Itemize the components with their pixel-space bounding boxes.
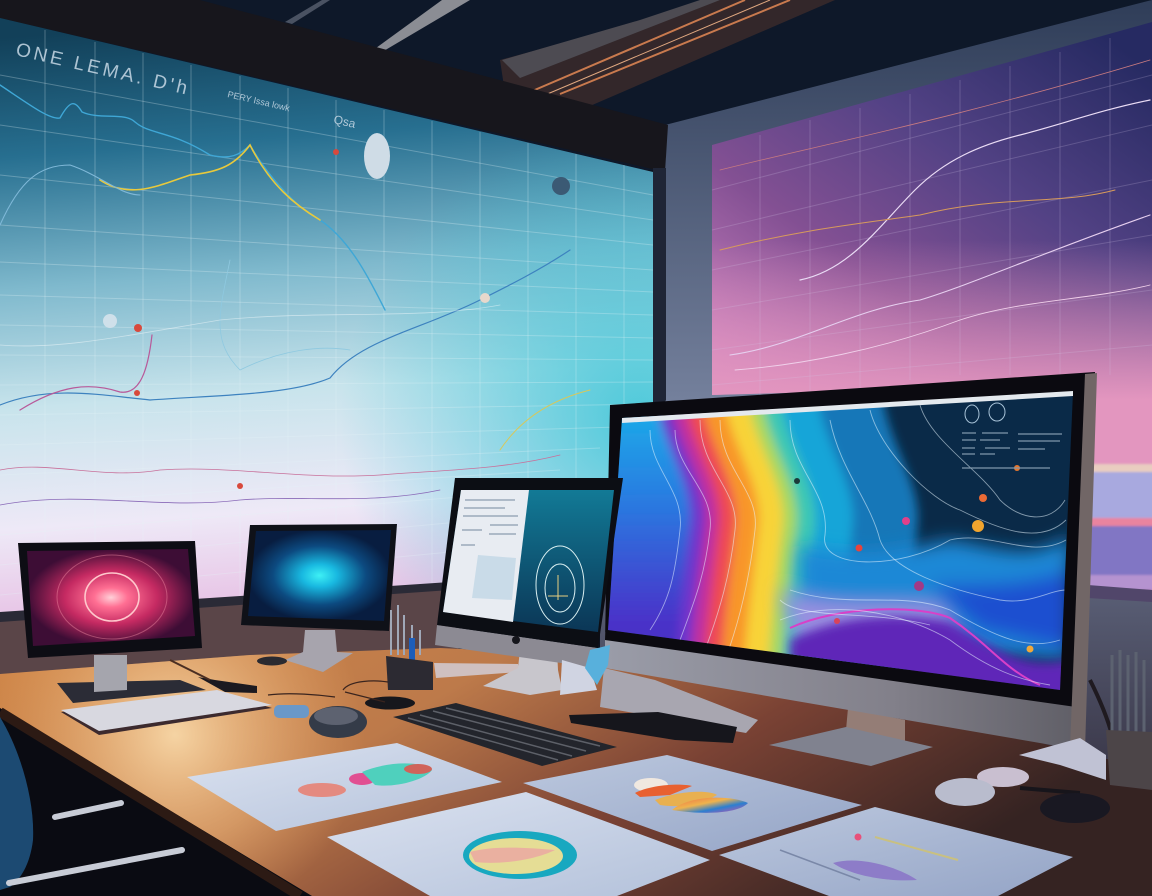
pen holder bbox=[386, 605, 433, 690]
stand neck bbox=[846, 708, 905, 745]
left wall screen bbox=[0, 18, 653, 615]
wall strip below left screen bbox=[0, 582, 460, 675]
chair bbox=[0, 717, 182, 890]
chart blobs bbox=[634, 778, 748, 813]
screen with rainbow wave bbox=[608, 396, 1073, 690]
chin bbox=[605, 632, 1083, 748]
tablet monitor bbox=[435, 478, 623, 695]
desk objects left bbox=[170, 656, 415, 718]
screen info panel bbox=[962, 403, 1062, 468]
chart lines bbox=[720, 60, 1150, 370]
magenta ridge line bbox=[790, 609, 1040, 685]
wall screen labels bbox=[14, 39, 357, 131]
keyboard bbox=[393, 703, 617, 766]
paper: bottom left bbox=[327, 792, 710, 896]
sunset bands at right bbox=[1090, 463, 1152, 590]
paper cone bbox=[560, 645, 610, 695]
chart bbox=[780, 834, 958, 880]
data points bbox=[103, 149, 570, 489]
paper near tablet bbox=[434, 663, 520, 678]
ceiling bbox=[0, 0, 1152, 170]
wall screen labels: PERY Issa lowk bbox=[227, 89, 291, 113]
paper: bottom right bbox=[719, 807, 1073, 896]
wall frame above left screen bbox=[0, 0, 668, 172]
screen frame bottom bbox=[1088, 585, 1152, 602]
grid lines bbox=[0, 30, 653, 610]
right wall screen bbox=[712, 22, 1152, 602]
blue monitor bbox=[241, 524, 397, 672]
wall frame right of left screen bbox=[620, 168, 666, 480]
mouse bbox=[309, 706, 367, 738]
dark object on base bbox=[569, 712, 737, 743]
grid lines bbox=[712, 38, 1152, 400]
desk bbox=[0, 648, 1152, 896]
lower wave region bbox=[780, 535, 1070, 660]
under desk darkness bbox=[0, 700, 320, 896]
wall screen labels: Qsa bbox=[332, 112, 357, 131]
keyboard left bbox=[61, 690, 272, 735]
glass base bbox=[600, 668, 758, 733]
chart lines bbox=[0, 85, 590, 505]
pen cup right bbox=[1090, 650, 1152, 790]
wall screen labels: ONE LEMA. D'h bbox=[14, 39, 189, 99]
chart blobs bbox=[298, 763, 432, 797]
paper: top left bbox=[187, 743, 502, 831]
right wall bbox=[600, 0, 1152, 760]
title bar bbox=[622, 391, 1073, 423]
pink monitor bbox=[18, 541, 206, 703]
pink glow toward bottom of screen bbox=[712, 240, 1152, 467]
document page bbox=[443, 490, 529, 622]
side rim bbox=[1070, 373, 1097, 750]
right mouse and objects bbox=[935, 738, 1110, 823]
large monitor bbox=[569, 372, 1097, 766]
screen flow lines bbox=[650, 405, 1066, 685]
moon marker bbox=[364, 133, 390, 179]
paper: top right bbox=[523, 755, 862, 851]
data dots bbox=[794, 465, 1034, 652]
ceiling light fixture bbox=[500, 0, 835, 106]
bezel bbox=[605, 372, 1095, 708]
donut chart bbox=[463, 831, 577, 879]
stand base bbox=[769, 727, 933, 766]
orbit diagram bbox=[536, 546, 584, 624]
